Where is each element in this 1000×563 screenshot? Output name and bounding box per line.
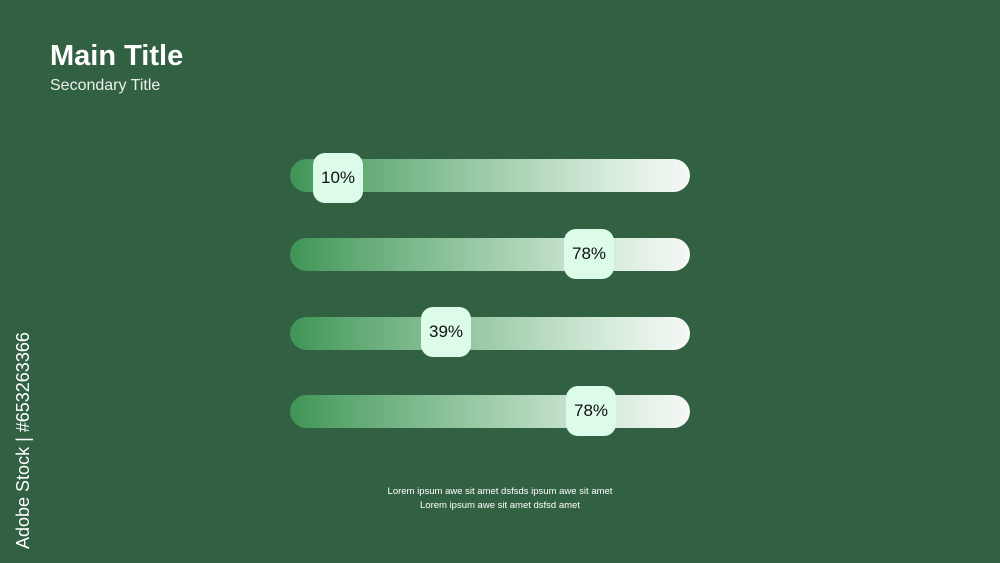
side id: Adobe Stock | #653263366 — [13, 332, 33, 549]
knob 3: 39% — [429, 322, 463, 341]
knob 4: 78% — [574, 401, 608, 420]
bar 3 — [290, 317, 690, 350]
knob 1: 10% — [321, 168, 355, 187]
caption: Lorem ipsum awe sit amet dsfsd amet — [420, 500, 580, 511]
knob 4 — [566, 386, 616, 436]
title: Main Title — [50, 40, 183, 72]
bar 4 — [290, 395, 690, 428]
subtitle: Secondary Title — [50, 77, 160, 94]
bar 2 — [290, 238, 690, 271]
caption: Lorem ipsum awe sit amet dsfsds ipsum awe sit amet — [388, 486, 612, 497]
knob 3 — [421, 307, 471, 357]
caption — [388, 486, 612, 511]
knob 1 — [313, 153, 363, 203]
bar 1 — [290, 159, 690, 192]
knob 2 — [564, 229, 614, 279]
knob 2: 78% — [572, 244, 606, 263]
